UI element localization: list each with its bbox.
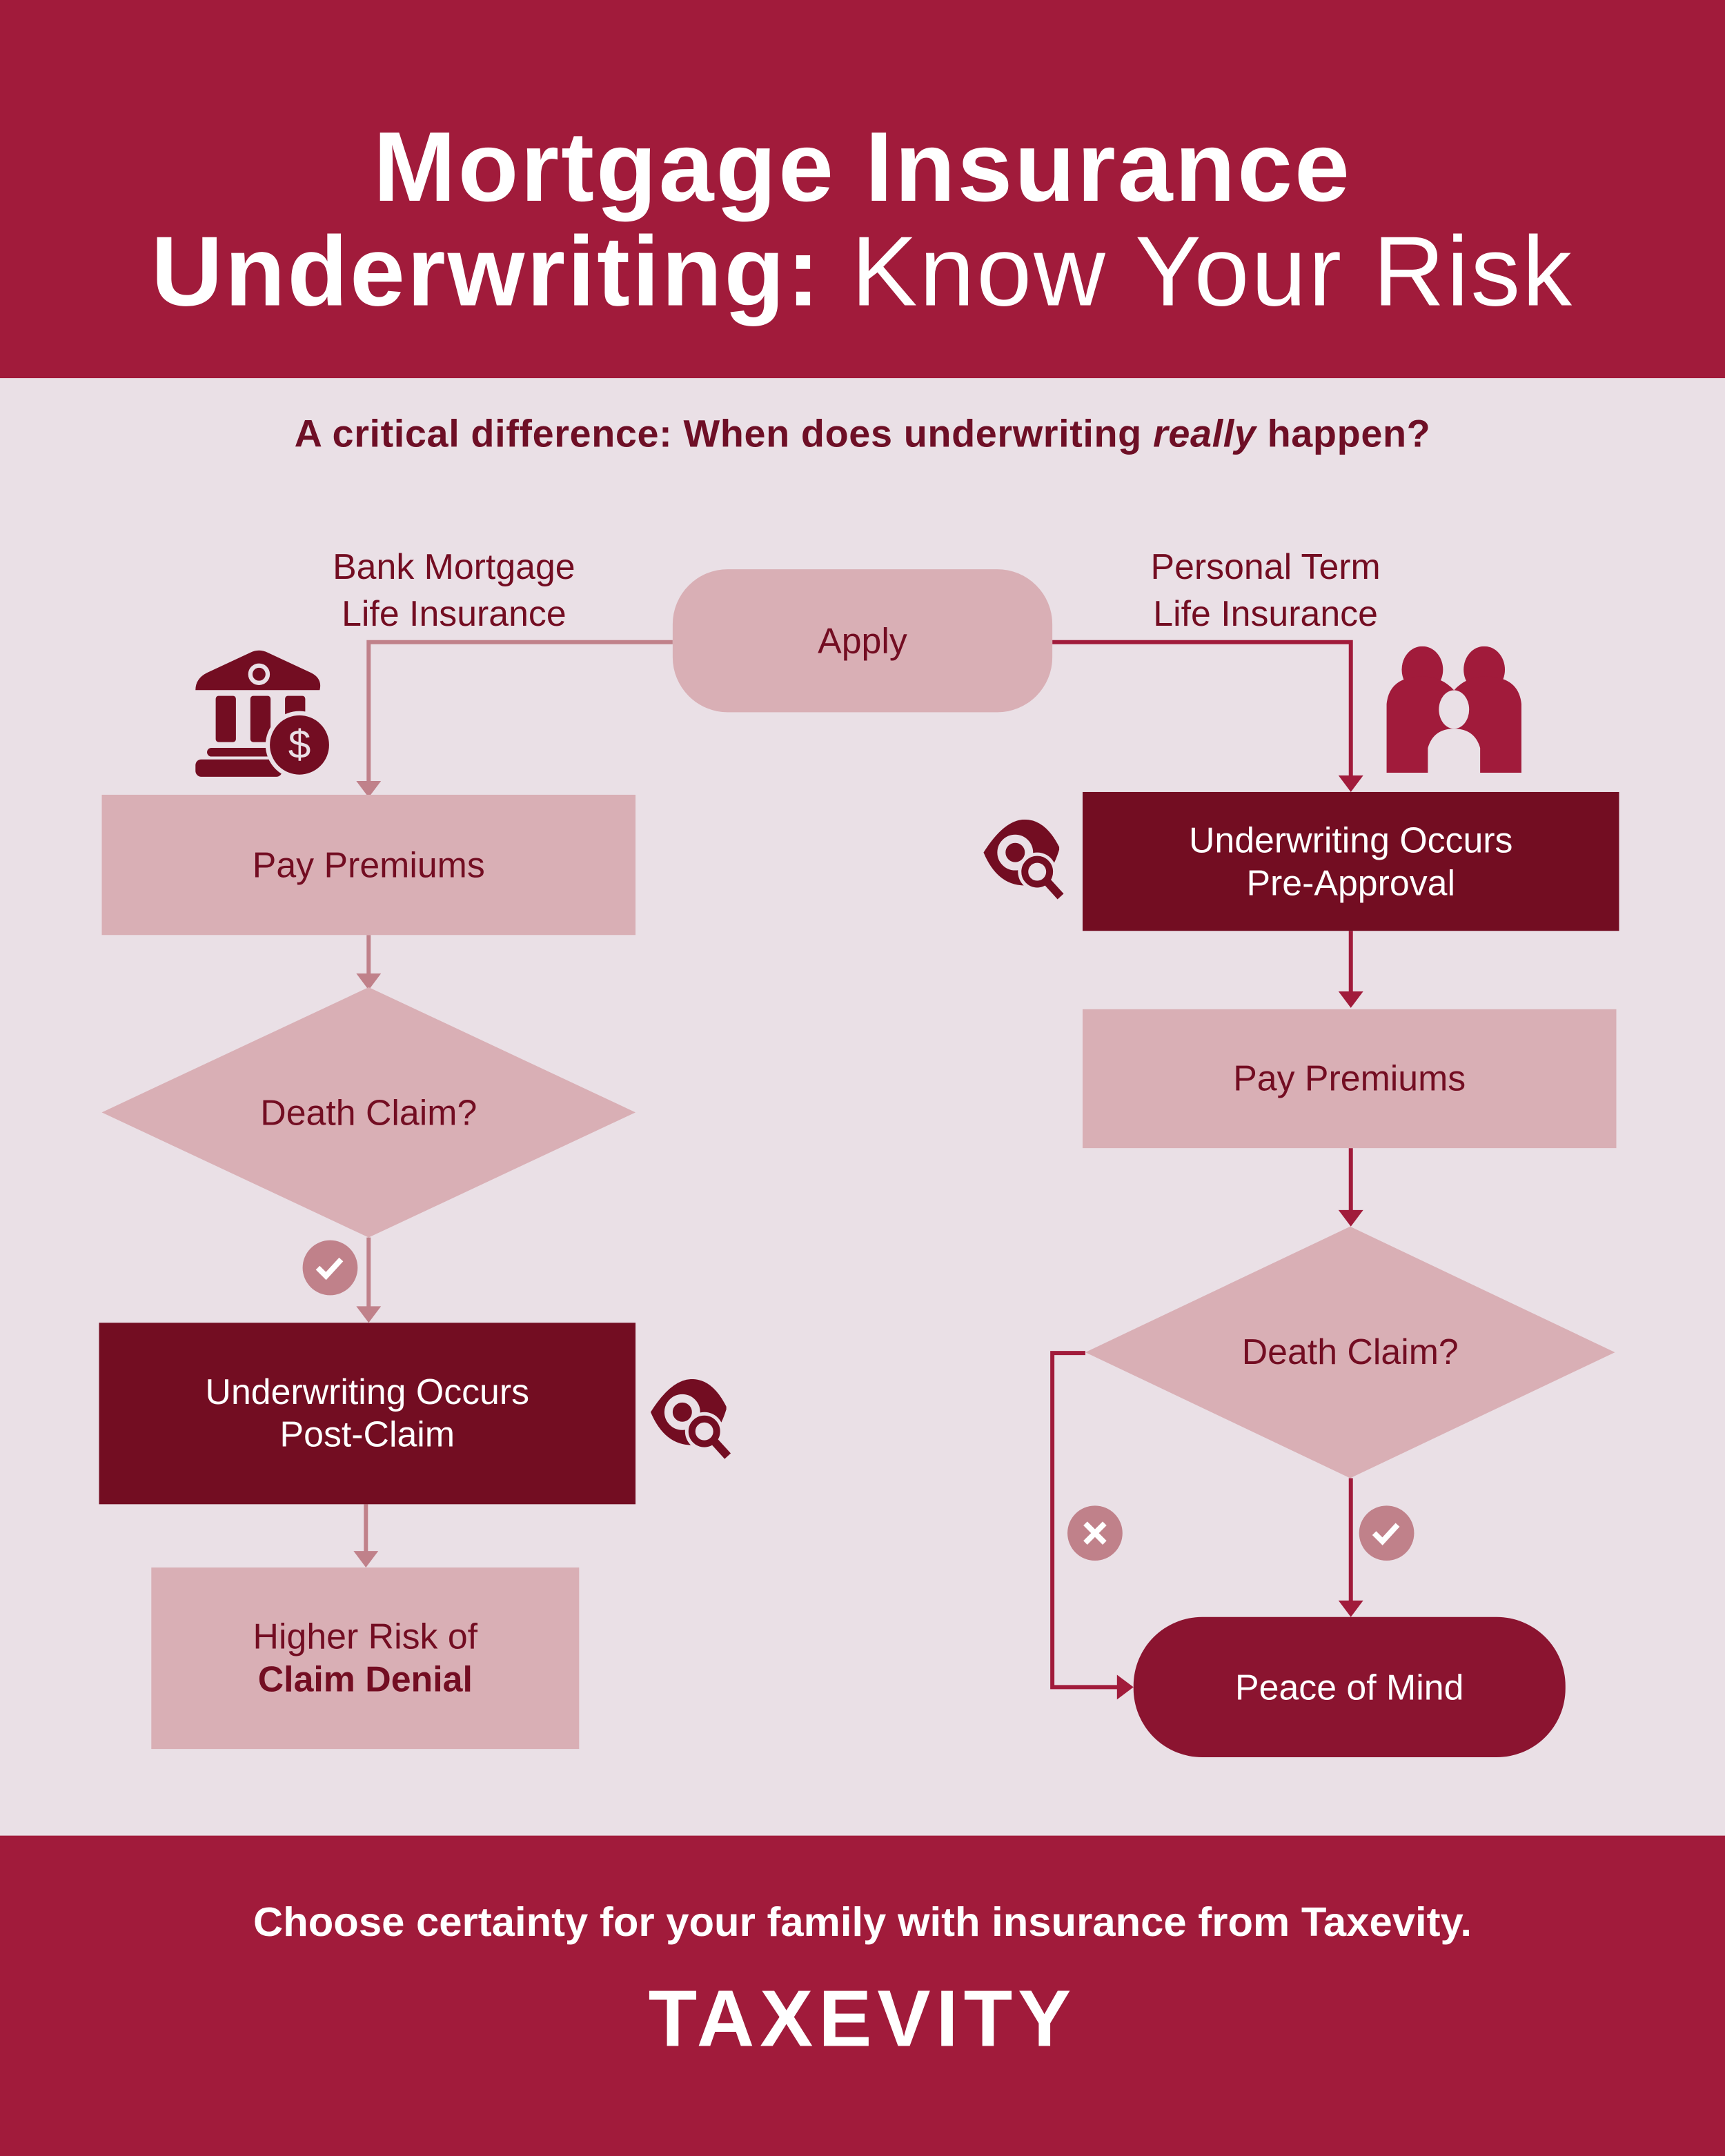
footer text: Choose certainty for your family with insurance from Taxevity. xyxy=(253,1900,1472,1946)
footer xyxy=(0,1836,1725,2156)
icon: people xyxy=(1387,646,1521,773)
underwriting pre-approval: Pre-Approval xyxy=(1246,862,1455,902)
pay premiums right: Pay Premiums xyxy=(1233,1058,1466,1098)
peace of mind xyxy=(1134,1617,1566,1757)
diamond left: Death Claim? xyxy=(260,1091,477,1132)
icon: eye search left xyxy=(651,1379,731,1459)
underwriting pre-approval xyxy=(1083,792,1619,931)
label: personal term xyxy=(1151,546,1381,634)
icon: bank: $ xyxy=(288,722,310,767)
underwriting post-claim: Post-Claim xyxy=(280,1414,455,1455)
pay premiums left xyxy=(102,795,635,935)
pay premiums left: Pay Premiums xyxy=(253,844,485,884)
peace of mind: Peace of Mind xyxy=(1235,1665,1463,1707)
icon: x circle xyxy=(1067,1505,1123,1561)
label: personal term: Life Insurance xyxy=(1153,593,1378,634)
label: bank mortgage: Life Insurance xyxy=(342,593,566,634)
icon: check right xyxy=(1359,1505,1414,1561)
underwriting post-claim xyxy=(99,1323,635,1504)
label: bank mortgage: Bank Mortgage xyxy=(333,546,575,587)
logo: TAXEVITY xyxy=(649,1975,1076,2064)
title xyxy=(151,112,1574,327)
label: personal term: Personal Term xyxy=(1151,546,1381,587)
header xyxy=(0,0,1725,378)
diamond right: Death Claim? xyxy=(1242,1331,1459,1372)
title: Mortgage Insurance xyxy=(373,112,1352,223)
subtitle: A critical difference: When does underwriting really happen? xyxy=(295,413,1430,455)
higher risk: Higher Risk of xyxy=(253,1616,477,1657)
icon: check left xyxy=(302,1240,357,1296)
higher risk: Claim Denial xyxy=(258,1659,473,1699)
higher risk xyxy=(151,1567,579,1749)
icon: bank xyxy=(195,650,329,777)
title: Underwriting: Know Your Risk xyxy=(151,217,1574,327)
underwriting pre-approval: Underwriting Occurs xyxy=(1189,819,1512,860)
pay premiums right xyxy=(1083,1009,1617,1148)
label: bank mortgage xyxy=(333,546,575,634)
apply xyxy=(673,569,1052,712)
underwriting post-claim: Underwriting Occurs xyxy=(206,1371,529,1412)
diamond right xyxy=(1085,1227,1615,1478)
apply: Apply xyxy=(818,620,907,661)
diamond left xyxy=(102,987,635,1238)
icon: eye search right xyxy=(984,820,1064,900)
